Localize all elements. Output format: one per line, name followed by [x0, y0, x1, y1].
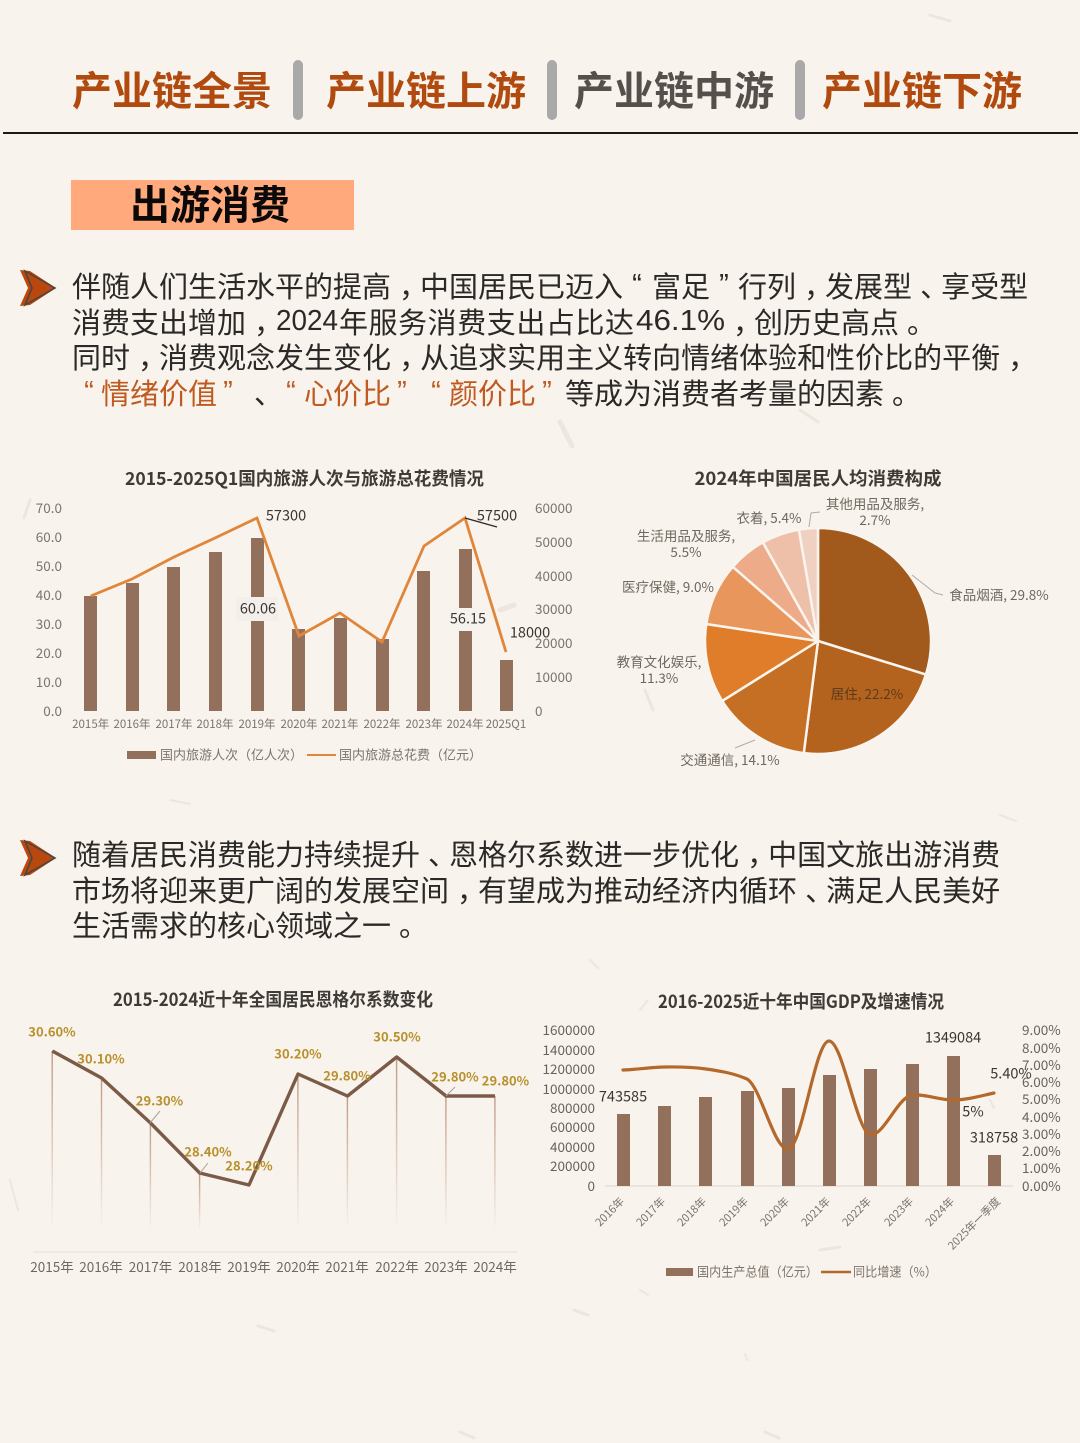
chart title: 2015-2024近十年全国居民恩格尔系数变化	[113, 986, 433, 1012]
text block: intro paragraph: 同时 ，消费观念发生变化 ，从追求实用主义转向情绪体验和性价比的平衡 ，	[72, 335, 1037, 377]
left axis labels: 50.0	[36, 555, 62, 575]
value labels	[28, 1022, 530, 1174]
right axis labels: 40000	[535, 565, 572, 585]
left axis labels: 20.0	[36, 642, 62, 662]
right axis labels: 50000	[535, 531, 572, 551]
axis line	[33, 1251, 517, 1253]
pie label: 食品烟酒: 食品烟酒, 29.8%	[949, 584, 1049, 604]
value labels: 30.20%	[274, 1044, 322, 1062]
text block: outlook paragraph	[72, 832, 1000, 945]
x axis labels: 2019年	[715, 1194, 752, 1230]
icon: arrow bullet 2	[20, 840, 56, 876]
x axis labels: 2015年	[30, 1256, 74, 1276]
left axis labels: 10.0	[36, 671, 62, 691]
data label: 57300: 57300	[266, 504, 306, 526]
left axis labels	[543, 1019, 595, 1195]
left axis labels	[36, 497, 62, 720]
right axis labels: 0.00%	[1022, 1175, 1061, 1195]
right axis labels: 20000	[535, 632, 572, 652]
x axis labels	[591, 1194, 1004, 1253]
value labels: 29.80%	[323, 1066, 371, 1084]
data labels: 318758	[970, 1126, 1018, 1148]
data labels	[599, 1026, 1032, 1148]
right axis labels: 7.00%	[1022, 1054, 1061, 1074]
smooth line: growth rate	[623, 1041, 994, 1149]
line: spending	[91, 518, 506, 652]
chart: 2024 per-capita consumption pie	[617, 465, 1049, 769]
text block: intro paragraph: 46.1%	[636, 305, 725, 337]
pie label: 衣着: 衣着, 5.4%	[737, 507, 801, 527]
left axis labels: 1000000	[543, 1078, 595, 1098]
right axis labels	[535, 497, 572, 720]
x axis labels: 2023年	[424, 1256, 468, 1276]
x axis labels: 2022年	[838, 1194, 875, 1230]
x axis labels: 2021年	[325, 1256, 369, 1276]
bars: GDP	[617, 1056, 1001, 1186]
data labels: 743585	[599, 1086, 647, 1106]
right axis labels: 8.00%	[1022, 1037, 1061, 1057]
data label: 18000: 18000	[510, 622, 550, 642]
text block: intro paragraph: 、	[254, 371, 283, 413]
right axis labels	[1022, 1019, 1061, 1195]
value labels: 30.50%	[373, 1026, 421, 1046]
left axis labels: 1400000	[543, 1039, 595, 1059]
x axis labels: 2016年	[79, 1256, 123, 1276]
text block: intro paragraph: “	[632, 269, 642, 301]
right axis labels: 4.00%	[1022, 1106, 1061, 1126]
pie label: 生活用品及服务: 生活用品及服务,	[637, 525, 735, 545]
x axis labels: 2025Q1	[486, 716, 526, 732]
data label: 56.15: 56.15	[450, 608, 486, 628]
chart title: 2015-2025Q1国内旅游人次与旅游总花费情况	[125, 465, 484, 491]
x axis labels: 2019年	[227, 1256, 271, 1276]
pie label: 教育文化娱乐: 教育文化娱乐,	[617, 651, 701, 671]
value labels: 29.80%	[482, 1070, 530, 1090]
text block: intro paragraph: ，创历史高点 。	[733, 300, 936, 342]
text block: intro paragraph: 心价比	[304, 371, 391, 413]
pie label: 其他用品及服务: 2.7%	[859, 509, 891, 529]
x axis labels: 2015年	[72, 716, 109, 732]
chart title: 2024年中国居民人均消费构成	[694, 465, 942, 491]
right axis labels: 9.00%	[1022, 1019, 1061, 1039]
pie label: 教育文化娱乐: 11.3%	[640, 667, 678, 687]
left axis labels: 60.0	[36, 526, 62, 546]
x axis labels: 2020年	[276, 1256, 320, 1276]
right axis labels: 60000	[535, 497, 572, 517]
tab divider 3	[795, 60, 805, 120]
x axis labels: 2020年	[280, 716, 318, 732]
navigation tabs	[72, 59, 1022, 120]
pie leader lines	[735, 512, 943, 748]
chart: domestic tourism visits and spending	[36, 465, 572, 764]
pie label: 医疗保健: 医疗保健, 9.0%	[622, 576, 714, 596]
text block: intro paragraph: ”	[719, 269, 729, 301]
x axis labels: 2021年	[797, 1194, 834, 1230]
value labels: 29.30%	[136, 1090, 184, 1110]
pie label: 其他用品及服务: 其他用品及服务,	[826, 493, 924, 513]
tab divider 2	[547, 60, 557, 120]
x axis labels: 2024年	[473, 1256, 517, 1276]
text block: intro paragraph: 富足	[652, 264, 710, 306]
x axis labels: 2017年	[155, 716, 193, 732]
x axis labels: 2023年	[405, 716, 443, 732]
x axis labels: 2022年	[375, 1256, 419, 1276]
tab divider 1	[293, 60, 303, 120]
data labels: 1349084	[925, 1026, 981, 1048]
bars: visits	[84, 538, 513, 711]
right axis labels: 30000	[535, 598, 572, 618]
text block: outlook paragraph: 随着居民消费能力持续提升 、恩格尔系数进一步优化 ，中国文旅出游消费	[72, 832, 1000, 874]
x axis labels: 2019年	[238, 716, 276, 732]
section heading: 出游消费	[71, 173, 354, 231]
text block: intro paragraph: “	[286, 376, 296, 408]
value labels: 28.40%	[184, 1142, 232, 1160]
pie slices	[705, 528, 931, 754]
left axis labels: 200000	[550, 1155, 595, 1175]
label leader lines	[150, 1087, 455, 1173]
data labels: 5.40%	[990, 1062, 1032, 1084]
x axis labels: 2024年	[446, 716, 484, 732]
x axis labels	[30, 1256, 517, 1276]
left axis labels: 600000	[550, 1116, 595, 1136]
x axis labels: 2017年	[632, 1194, 669, 1230]
pie label: 生活用品及服务	[637, 525, 735, 561]
left axis labels: 1200000	[543, 1058, 595, 1078]
data labels: 5%	[962, 1100, 984, 1122]
text block: intro paragraph: 行列 ，发展型 、享受型	[738, 264, 1028, 306]
data label: 60.06: 60.06	[240, 598, 276, 618]
tab: 产业链上游: 产业链上游	[326, 59, 526, 117]
legend	[127, 744, 482, 764]
engel line	[52, 1051, 495, 1185]
left axis labels: 30.0	[36, 613, 62, 633]
left axis labels: 40.0	[36, 584, 62, 604]
left axis labels: 0	[588, 1175, 595, 1195]
legend	[666, 1262, 937, 1280]
text block: intro paragraph: 消费支出增加 ，	[72, 300, 283, 342]
right axis labels: 5.00%	[1022, 1088, 1061, 1108]
tab: 产业链全景: 产业链全景	[72, 59, 272, 117]
tab: 产业链下游: 产业链下游	[822, 59, 1022, 117]
x axis labels: 2018年	[178, 1256, 222, 1276]
legend: 同比增速（%）	[853, 1262, 937, 1280]
text block: intro paragraph: ”	[223, 376, 233, 408]
legend: 国内旅游人次（亿人次）	[160, 744, 303, 764]
text block: outlook paragraph: 生活需求的核心领域之一 。	[72, 903, 428, 945]
text block: intro paragraph: ”	[397, 376, 407, 408]
baseline	[605, 1185, 1013, 1187]
drop lines	[52, 1051, 496, 1230]
icon: arrow bullet 1	[20, 270, 56, 306]
right axis labels: 10000	[535, 666, 572, 686]
value labels: 30.10%	[77, 1048, 125, 1068]
text block: intro paragraph: “	[431, 376, 441, 408]
x axis labels	[72, 716, 526, 732]
pie label: 居住: 居住, 22.2%	[831, 683, 903, 703]
chart title: 2016-2025近十年中国GDP及增速情况	[658, 988, 944, 1014]
chart: Engel coefficient line	[28, 986, 530, 1276]
right axis labels: 3.00%	[1022, 1123, 1061, 1143]
text block: intro paragraph: 伴随人们生活水平的提高 ，中国居民已迈入	[72, 264, 623, 306]
x axis labels: 2018年	[196, 716, 234, 732]
section heading: 出游消费: 出游消费	[130, 173, 290, 231]
text block: intro paragraph: 颜价比	[449, 371, 536, 413]
left axis labels: 400000	[550, 1136, 595, 1156]
x axis labels: 2020年	[756, 1194, 793, 1230]
legend: 国内生产总值（亿元）	[697, 1262, 818, 1280]
tab: 产业链中游: 产业链中游	[574, 59, 774, 117]
x axis labels: 2021年	[321, 716, 359, 732]
x axis labels: 2024年	[921, 1194, 958, 1230]
right axis labels: 1.00%	[1022, 1157, 1061, 1177]
x axis labels: 2016年	[113, 716, 151, 732]
legend: 国内旅游总花费（亿元）	[339, 744, 482, 764]
value labels: 28.20%	[225, 1156, 273, 1174]
pie label: 生活用品及服务: 5.5%	[670, 541, 702, 561]
pie label: 教育文化娱乐	[617, 651, 701, 687]
value labels: 29.80%	[431, 1066, 479, 1086]
left axis labels: 1600000	[543, 1019, 595, 1039]
left axis labels: 800000	[550, 1097, 595, 1117]
x axis labels: 2017年	[129, 1256, 172, 1276]
text block: intro paragraph: 等成为消费者考量的因素 。	[565, 371, 921, 413]
left axis labels: 70.0	[36, 497, 62, 517]
right axis labels: 2.00%	[1022, 1140, 1061, 1160]
chart: China GDP and growth	[543, 988, 1061, 1280]
x axis labels: 2025年一季度	[944, 1194, 1004, 1253]
pie label: 其他用品及服务	[826, 493, 924, 529]
x axis labels: 2018年	[673, 1194, 710, 1230]
text block: intro paragraph: “	[84, 376, 94, 408]
value labels: 30.60%	[28, 1022, 76, 1040]
x axis labels: 2023年	[880, 1194, 917, 1230]
pie label: 交通通信: 交通通信, 14.1%	[680, 749, 780, 769]
text block: intro paragraph: 年服务消费支出占比达	[339, 300, 634, 342]
text block: intro paragraph	[72, 264, 1037, 413]
text block: intro paragraph: ”	[542, 376, 552, 408]
left axis labels: 0.0	[43, 700, 62, 720]
text block: outlook paragraph: 市场将迎来更广阔的发展空间 ，有望成为推动经济内循环 、满足人民美好	[72, 868, 1000, 910]
right axis labels: 6.00%	[1022, 1071, 1061, 1091]
right axis labels: 0	[535, 700, 542, 720]
text block: intro paragraph: 2024	[276, 305, 338, 337]
leader line and data label: 57500: 57500	[477, 504, 517, 526]
text block: intro paragraph: 情绪价值	[101, 371, 217, 413]
x axis labels: 2022年	[363, 716, 401, 732]
x axis labels: 2016年	[591, 1194, 628, 1230]
